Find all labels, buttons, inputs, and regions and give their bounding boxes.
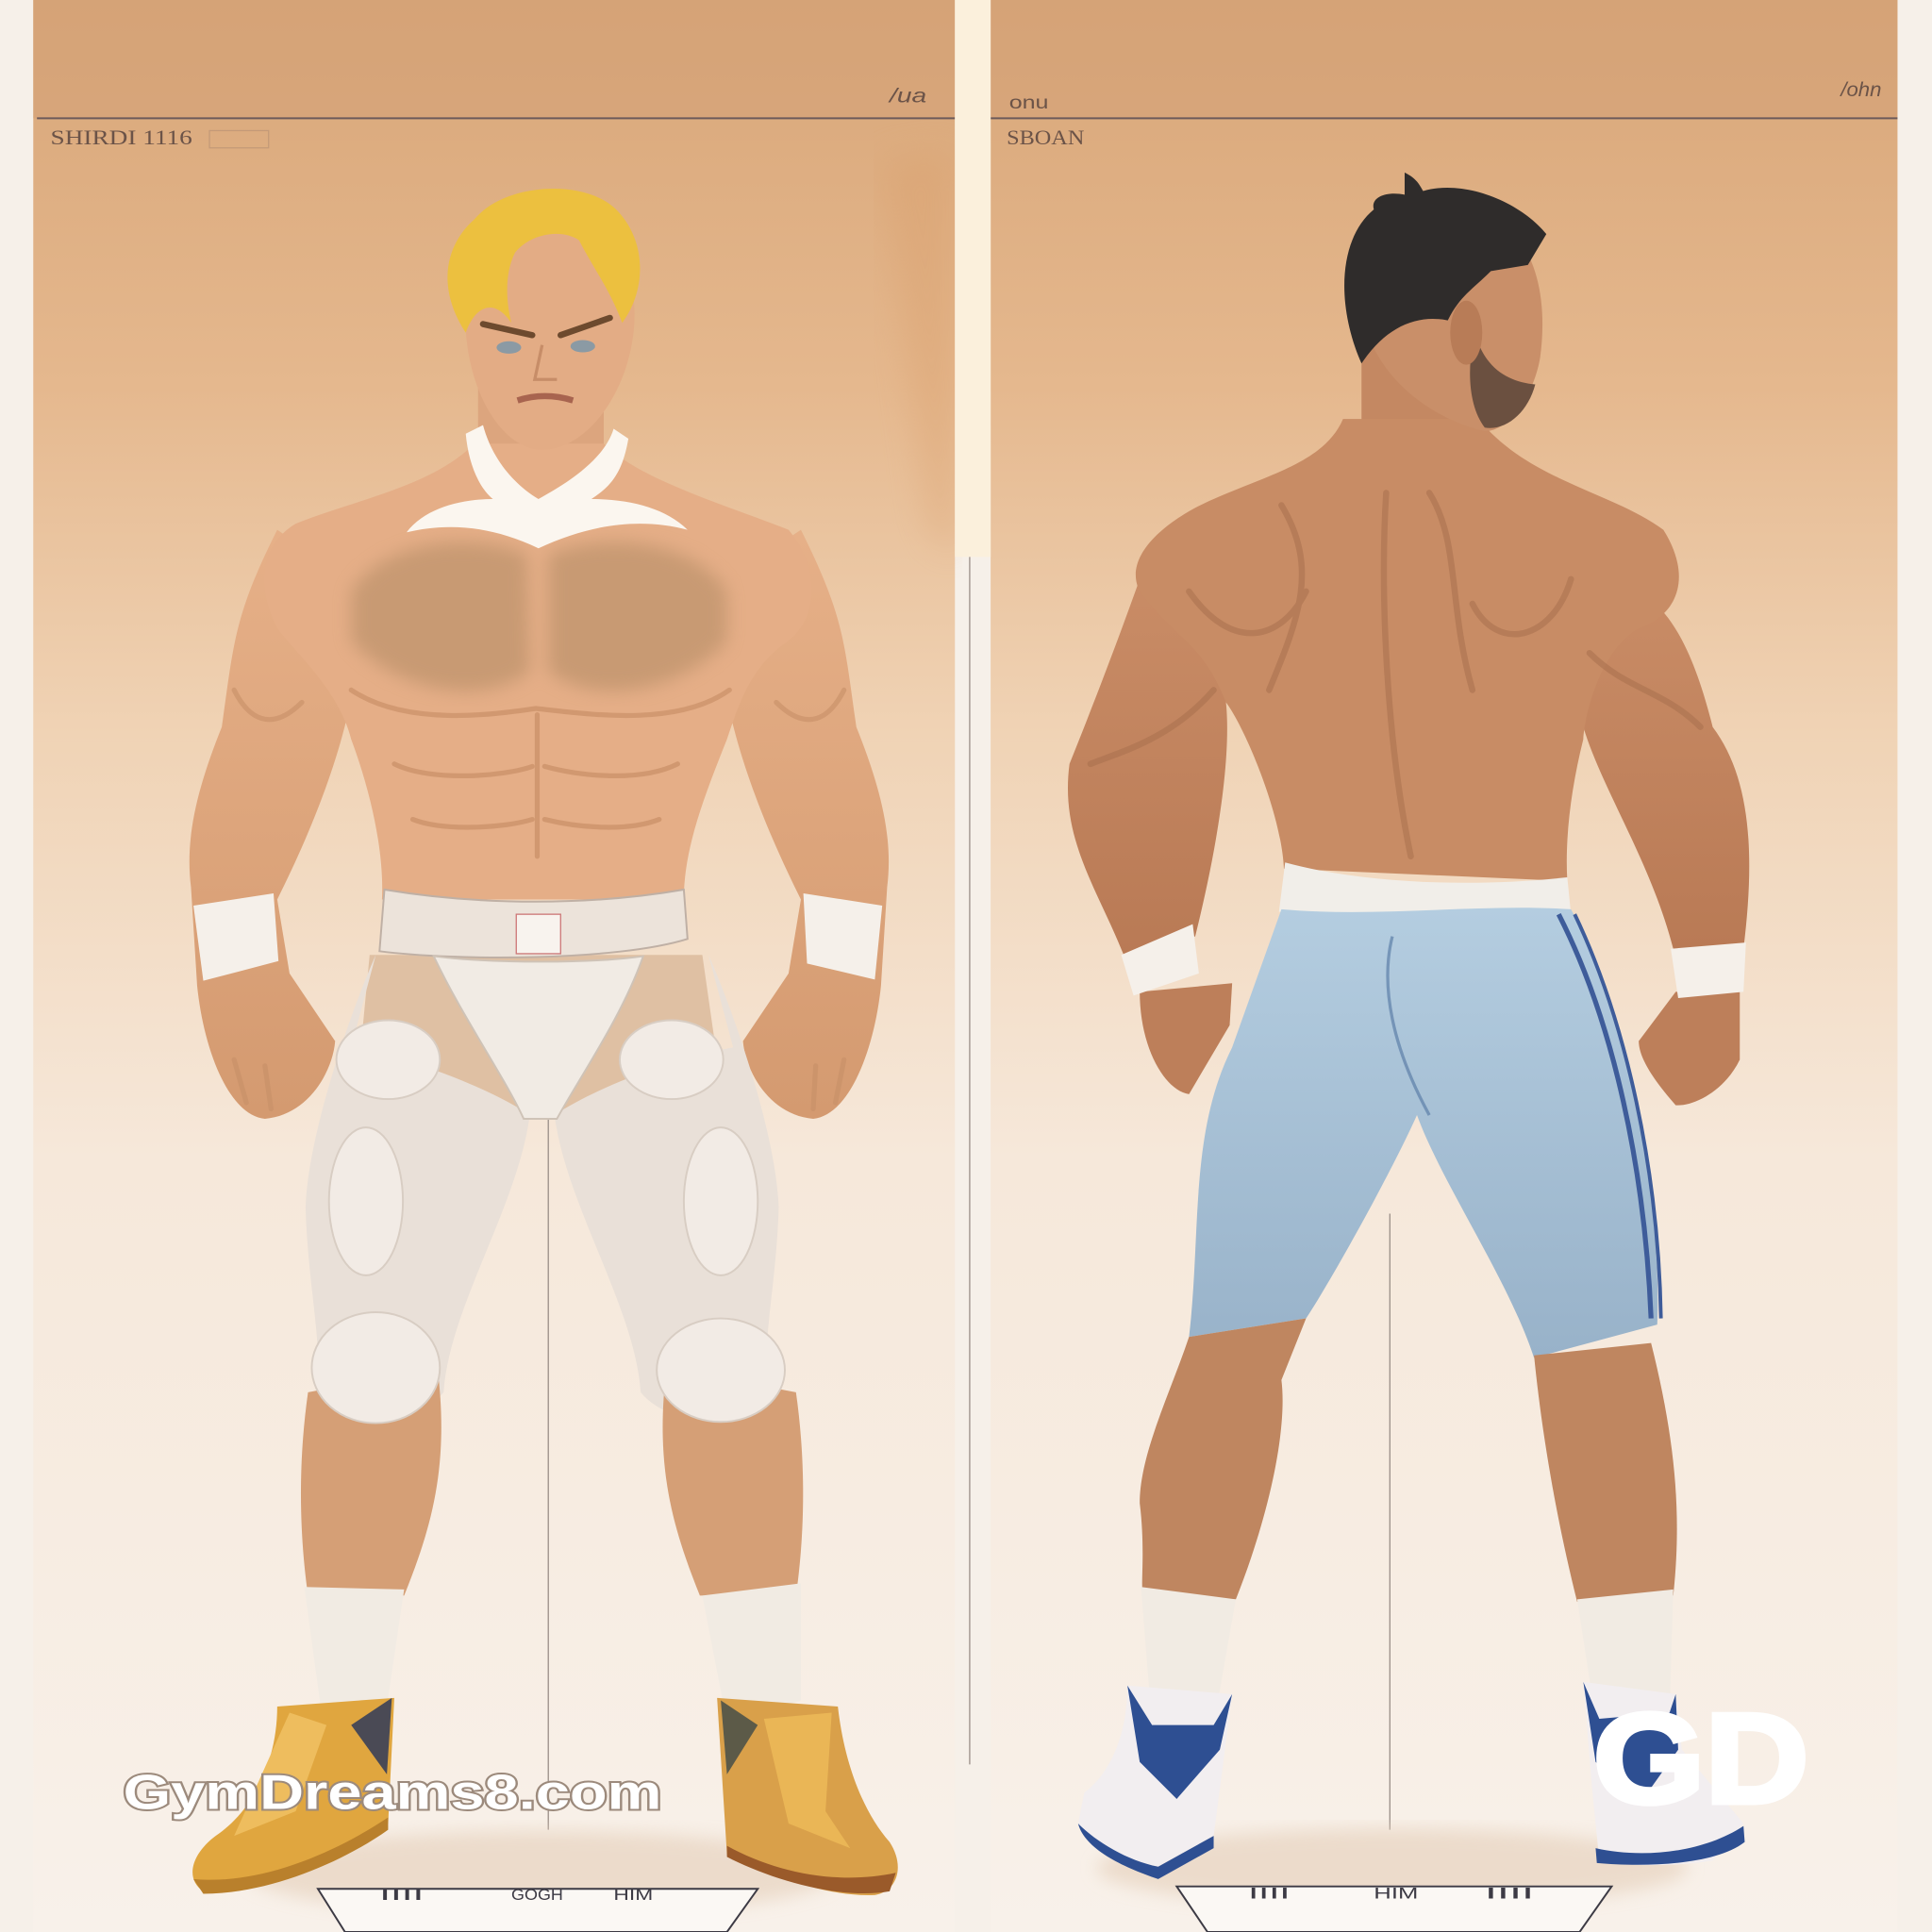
back head — [1361, 208, 1542, 431]
base plate: back — [1176, 1885, 1611, 1932]
front pads — [311, 1020, 785, 1424]
back left shoe — [1078, 1686, 1232, 1879]
back left fist — [1140, 983, 1232, 1094]
back right wrist band — [1671, 942, 1746, 998]
back ear — [1450, 301, 1482, 365]
front left wrist band — [193, 893, 278, 981]
back left sock — [1141, 1587, 1236, 1725]
back right shoe — [1583, 1682, 1744, 1865]
figure: back view — [1068, 173, 1749, 1879]
panel: back view backdrop — [991, 0, 1897, 1932]
back right fist — [1639, 991, 1740, 1106]
front right wrist band — [804, 893, 882, 979]
header label: front panel — [51, 85, 926, 149]
header label: back panel: /ohn — [1839, 79, 1881, 101]
front shorts centre panel — [434, 957, 643, 1119]
front left shoe — [192, 1698, 394, 1894]
header label: back panel: onu — [1009, 92, 1049, 113]
header label: front panel: /ua — [887, 85, 926, 107]
front left lower leg — [301, 1368, 441, 1595]
front head — [465, 216, 635, 450]
header label: front panel: SHIRDI 1116 — [51, 125, 192, 149]
back left arm — [1068, 579, 1227, 955]
base plate: front: HIM — [613, 1886, 653, 1904]
base plate: back: IIII — [1485, 1885, 1534, 1903]
header label: back panel — [1007, 79, 1881, 149]
front left arm — [190, 530, 358, 1119]
back right arm — [1583, 586, 1749, 949]
front neck — [478, 382, 604, 480]
base plate: front — [318, 1886, 758, 1932]
front face details — [483, 318, 610, 400]
figure: front view — [190, 189, 898, 1895]
base plate: back: IIII — [1248, 1885, 1291, 1903]
back neck — [1361, 345, 1485, 468]
floor shadows — [246, 1828, 1688, 1915]
back right sock — [1577, 1590, 1674, 1719]
front hip insets — [358, 955, 721, 1119]
measurement guide lines — [548, 557, 1390, 1830]
back hair — [1344, 173, 1546, 363]
front hair — [447, 189, 640, 333]
back left lower leg — [1140, 1319, 1306, 1599]
front abdominal shading — [351, 690, 729, 857]
back left wrist band — [1122, 924, 1199, 995]
front waistband tag — [516, 914, 560, 954]
front arm shading — [234, 690, 844, 1109]
front right lower leg — [662, 1368, 803, 1595]
front waistband — [379, 890, 688, 958]
back shorts seams — [1388, 914, 1661, 1319]
front right shoe — [717, 1698, 898, 1895]
front right arm — [721, 530, 889, 1119]
header label: back panel: SBOAN — [1007, 125, 1084, 149]
base plate: front: GOGH — [511, 1886, 563, 1904]
front right leg guard — [555, 955, 778, 1423]
front left leg guard — [306, 955, 530, 1423]
front right sock — [702, 1583, 801, 1723]
back waistband — [1279, 862, 1571, 914]
watermark: GD logo: GD — [1593, 1687, 1808, 1830]
panel: front view backdrop — [33, 0, 955, 1932]
base plate: back: HIM — [1374, 1885, 1418, 1903]
back muscle shading — [1091, 492, 1700, 857]
back shorts — [1189, 908, 1657, 1357]
front left sock — [305, 1587, 404, 1723]
base plate: front: IIII — [379, 1886, 424, 1904]
front chest shading — [351, 542, 727, 691]
front collar — [407, 425, 688, 548]
back beard — [1470, 333, 1535, 428]
front torso — [264, 443, 811, 899]
centre cream divider strip — [955, 0, 991, 557]
back torso — [1136, 419, 1679, 881]
watermark: site name: GymDreams8.com — [124, 1765, 661, 1820]
back right lower leg — [1534, 1343, 1677, 1602]
